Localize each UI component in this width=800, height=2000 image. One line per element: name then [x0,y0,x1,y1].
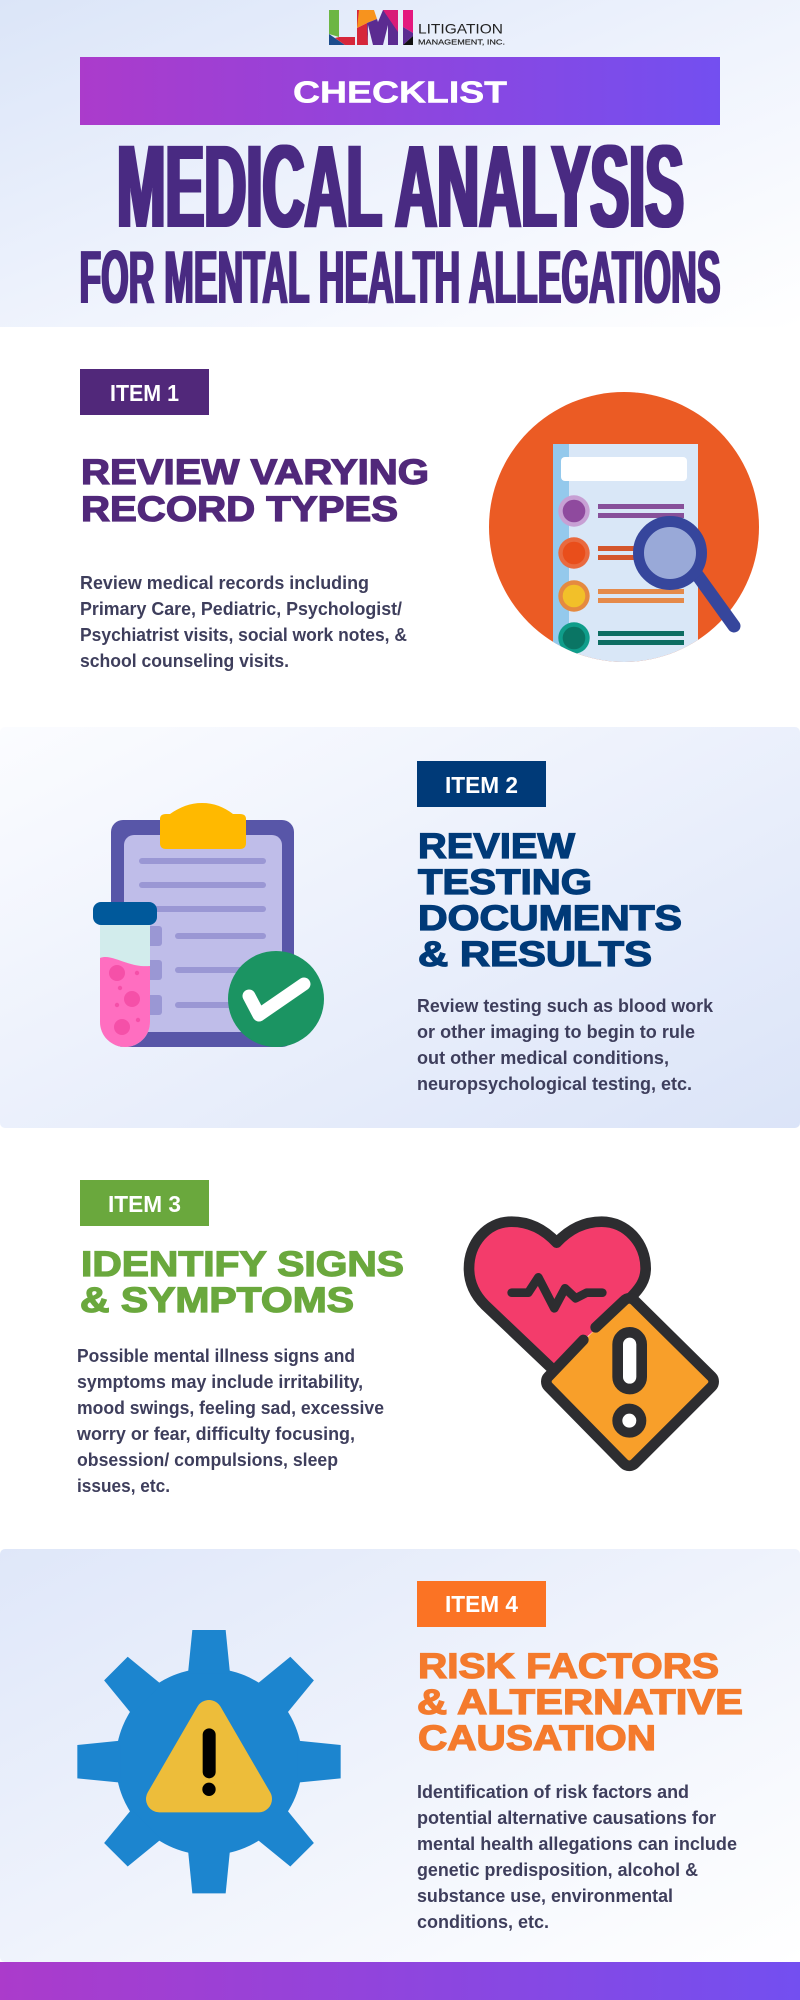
icon: document under magnifying glass [489,392,759,669]
body text: item 3: obsession/ compulsions, sleep [77,1450,338,1470]
checklist banner: CHECKLIST [293,74,507,110]
body text: item 1: Review medical records including [80,573,369,593]
icon: heart with warning diamond [469,1222,714,1466]
body text: item 3: mood swings, feeling sad, excessive [77,1398,384,1418]
heading: item 2 [418,826,682,974]
body text: item 2: or other imaging to begin to rule [417,1022,695,1042]
body text: item 4 [417,1782,737,1932]
tag: item 1: ITEM 1 [110,380,179,406]
body text: item 3: symptoms may include irritability, [77,1372,363,1392]
tag: item 3: ITEM 3 [108,1191,181,1217]
body text: item 3: worry or fear, difficulty focusing, [76,1424,355,1444]
heading: item 4: RISK FACTORS [418,1646,719,1686]
icon: clipboard with test tube and check [93,803,324,1050]
tag: item 4 [417,1581,546,1627]
icon: gear with warning triangle [77,1630,341,1893]
body text: item 2: out other medical conditions, [417,1048,669,1068]
tag: item 2: ITEM 2 [445,772,518,798]
heading: item 3: & SYMPTOMS [80,1280,354,1320]
title [80,121,720,319]
panel: item 4 [0,1549,800,1962]
body text: item 3: issues, etc. [77,1476,170,1496]
checklist banner [80,57,720,125]
tag: item 1 [80,369,209,415]
heading: item 4 [417,1646,743,1758]
heading: item 2: & RESULTS [418,934,652,974]
panel: item 2 [0,727,800,1128]
tag: item 4: ITEM 4 [445,1591,518,1617]
logo: MANAGEMENT, INC. [418,40,505,46]
heading: item 4: & ALTERNATIVE [417,1682,743,1722]
logo [329,10,505,46]
heading: item 3: IDENTIFY SIGNS [81,1244,404,1284]
heading: item 4: CAUSATION [418,1718,656,1758]
body text: item 4: genetic predisposition, alcohol & [417,1860,698,1880]
header panel [0,0,800,327]
panel: item 3 [0,1128,800,1549]
logo: LITIGATION [418,20,503,36]
tag: item 2 [417,761,546,807]
heading: item 1: REVIEW VARYING [81,452,429,492]
body text: item 4: mental health allegations can include [417,1834,737,1854]
body text: item 1: Primary Care, Pediatric, Psychologist/ [80,599,402,619]
body text: item 2: Review testing such as blood work [417,996,714,1016]
heading: item 2: REVIEW [418,826,575,866]
body text: item 1: Psychiatrist visits, social work notes, & [80,625,407,645]
heading: item 2: TESTING [418,862,592,902]
heading: item 2: DOCUMENTS [418,898,682,938]
body text: item 4: conditions, etc. [417,1912,549,1932]
footer bar [0,1962,800,2000]
heading: item 1: RECORD TYPES [81,489,398,529]
body text: item 4: substance use, environmental [417,1886,673,1906]
body text: item 4: potential alternative causations for [417,1808,716,1828]
heading: item 1 [81,452,429,529]
body text: item 1 [80,573,407,671]
panel: item 1 [80,369,759,671]
body text: item 3 [76,1346,384,1496]
body text: item 2 [417,996,714,1094]
tag: item 3 [80,1180,209,1226]
body text: item 3: Possible mental illness signs and [77,1346,355,1366]
body text: item 1: school counseling visits. [80,651,289,671]
body text: item 4: Identification of risk factors and [417,1782,689,1802]
body text: item 2: neuropsychological testing, etc. [417,1074,692,1094]
heading: item 3 [80,1244,404,1320]
